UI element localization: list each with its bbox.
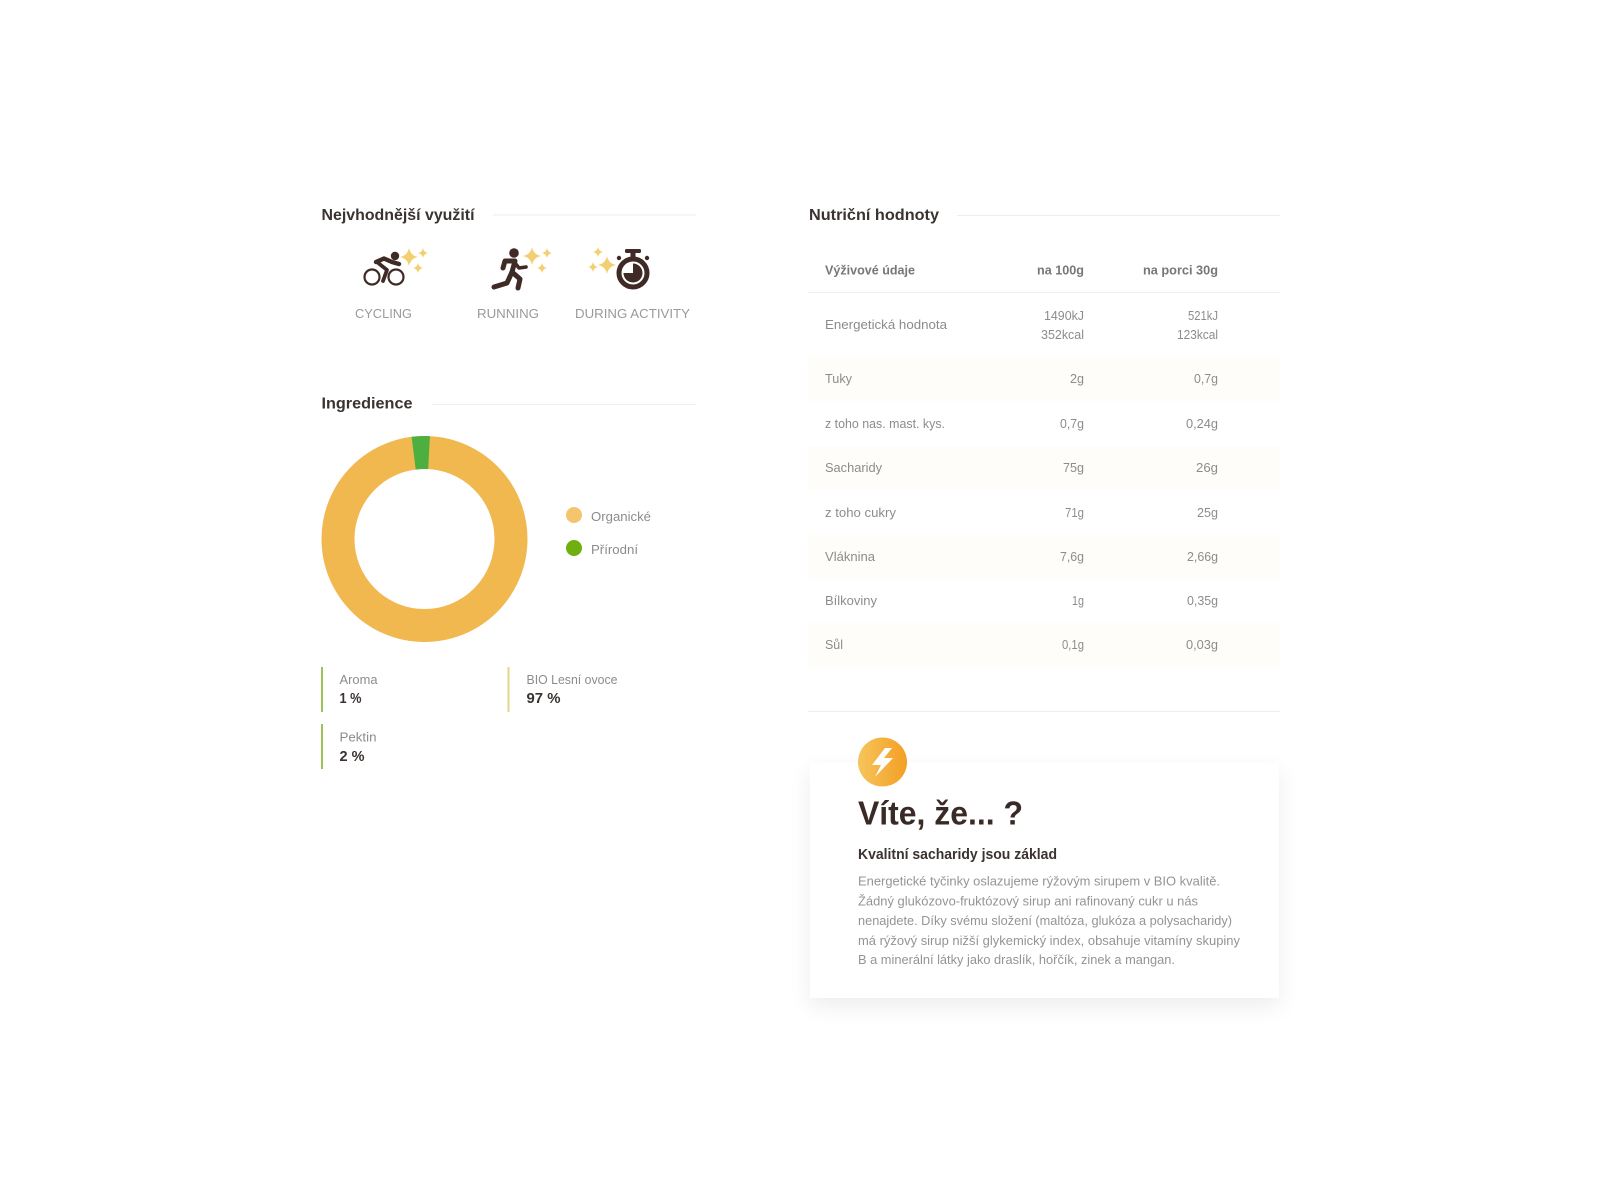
row: energy: 1490kJ: [1044, 308, 1084, 323]
row: sugars: z toho cukry: [825, 505, 896, 520]
row: saturated: 0,7g: [1060, 416, 1084, 431]
row: sugars: 71g: [1065, 505, 1084, 520]
row: salt: 0,1g: [1062, 637, 1084, 652]
label: cycling: CYCLING: [355, 306, 412, 321]
row: fibre: [825, 549, 1218, 564]
row: energy: Energetická hodnota: [825, 317, 948, 332]
row: fat: 0,7g: [1194, 371, 1218, 386]
row: fibre: 7,6g: [1060, 549, 1084, 564]
legend: organic: [566, 507, 651, 524]
row: energy: [825, 308, 1218, 342]
table header: na porci 30g: [1143, 262, 1218, 278]
heading: nutrition: Nutriční hodnoty: [809, 207, 939, 224]
body text: nenajdete. Díky svému složení (maltóza, glukóza a polysacharidy): [858, 913, 1232, 928]
panel: best use: [322, 207, 696, 321]
row: saturated: 0,24g: [1186, 416, 1218, 431]
ingredient: forest fruit: BIO Lesní ovoce: [526, 672, 618, 687]
row: carbohydrates: Sacharidy: [825, 460, 882, 475]
row: energy: 521kJ: [1188, 308, 1218, 323]
row: protein: [825, 593, 1218, 608]
row: carbohydrates: 26g: [1196, 460, 1218, 475]
row: fat: 2g: [1070, 371, 1084, 386]
row: protein: 1g: [1072, 593, 1084, 608]
table header: na 100g: [1037, 262, 1084, 278]
row: salt: [825, 637, 1218, 652]
ingredient: forest fruit: 97 %: [526, 690, 560, 707]
ingredient: aroma: 1 %: [340, 690, 362, 707]
row: fibre: Vláknina: [825, 549, 876, 564]
donut chart: [338, 436, 511, 626]
legend: natural: [566, 540, 638, 557]
row: saturated: z toho nas. mast. kys.: [825, 416, 945, 431]
ingredient: pectin: 2 %: [340, 748, 364, 765]
body text: Žádný glukózovo-fruktózový sirup ani rafinovaný cukr u nás: [858, 894, 1198, 908]
panel: did you know card: [810, 738, 1279, 998]
ingredient: pectin: [321, 724, 376, 769]
row: sugars: [825, 505, 1218, 520]
row: saturated: [825, 416, 1218, 431]
icon: stopwatch: [588, 247, 649, 287]
row: energy: 352kcal: [1041, 327, 1084, 342]
row: salt: Sůl: [825, 637, 843, 652]
legend: organic: Organické: [591, 509, 651, 524]
panel: ingredients: [321, 396, 696, 769]
label: during activity: DURING ACTIVITY: [575, 306, 690, 321]
row: fat: Tuky: [825, 371, 852, 386]
ingredient: pectin: Pektin: [340, 730, 376, 744]
ingredient: aroma: [321, 667, 378, 712]
body text: má rýžový sirup nižší glykemický index, obsahuje vitamíny skupiny: [858, 933, 1240, 948]
row: protein: Bílkoviny: [825, 593, 877, 608]
ingredient: forest fruit: [508, 667, 618, 712]
row: salt: 0,03g: [1186, 637, 1218, 652]
body text: Energetické tyčinky oslazujeme rýžovým sirupem v BIO kvalitě.: [858, 874, 1220, 888]
legend: natural: Přírodní: [591, 542, 638, 557]
body text: [858, 874, 1240, 967]
icon: running: [494, 247, 552, 288]
table header: Výživové údaje: [825, 262, 915, 278]
row: protein: 0,35g: [1187, 593, 1218, 608]
ingredient: aroma: Aroma: [340, 672, 378, 687]
row: fat: [825, 371, 1218, 386]
heading: best use: Nejvhodnější využití: [322, 207, 475, 224]
row: carbohydrates: 75g: [1063, 460, 1084, 475]
heading: ingredients: Ingredience: [322, 396, 413, 412]
table header: [825, 262, 1218, 278]
icon: lightning badge: [858, 738, 907, 786]
row: carbohydrates: [825, 460, 1218, 475]
title: did you know: Víte, že... ?: [858, 794, 1023, 832]
panel: nutrition table: [808, 207, 1280, 712]
row: sugars: 25g: [1197, 505, 1218, 520]
row: energy: 123kcal: [1177, 327, 1218, 342]
row: fibre: 2,66g: [1187, 549, 1218, 564]
icon: cycling: [364, 248, 428, 284]
label: running: RUNNING: [477, 306, 539, 321]
subheading: Kvalitní sacharidy jsou základ: [858, 847, 1057, 863]
body text: B a minerální látky jako draslík, hořčík, zinek a mangan.: [858, 952, 1175, 967]
